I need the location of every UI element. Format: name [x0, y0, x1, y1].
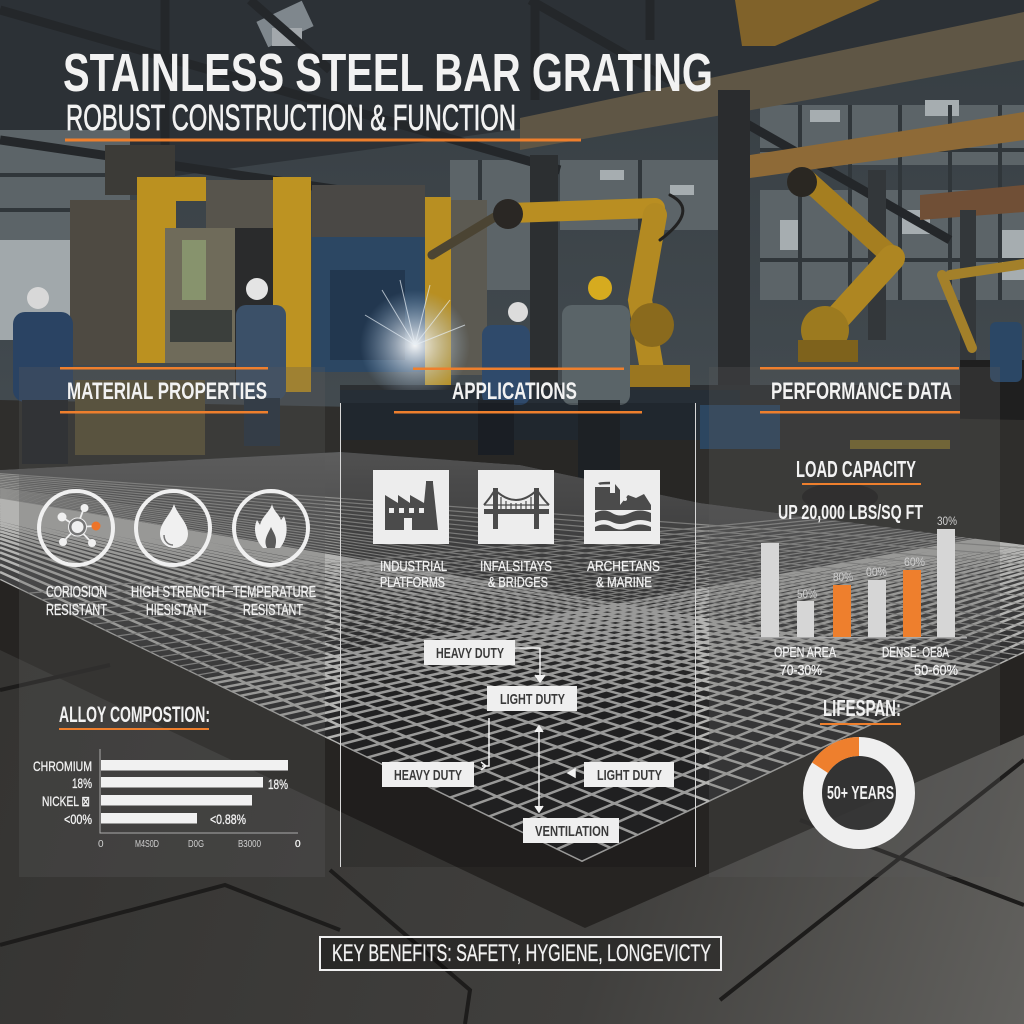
- floor: [0, 560, 1024, 1024]
- bar chart: open area: 60%: [904, 555, 925, 569]
- flow box: heavy duty lower: HEAVY DUTY: [394, 767, 462, 784]
- sparks: [360, 280, 470, 400]
- heading: material properties: MATERIAL PROPERTIES: [67, 378, 267, 405]
- bar chart: open area: 50-60%: [914, 662, 958, 679]
- panel: performance data: [709, 367, 1000, 877]
- bar chart: alloy composition: [33, 749, 301, 850]
- label: industrial platforms: INDUSTRIAL: [380, 558, 447, 575]
- floor cracks: [0, 665, 1024, 1024]
- title: STAINLESS STEEL BAR GRATING: [63, 43, 713, 103]
- heading: applications: APPLICATIONS: [452, 378, 577, 405]
- label: infrastructure and bridges: INFALSITAYS: [480, 558, 552, 575]
- bar chart: alloy composition: 18%: [72, 775, 92, 791]
- heading: load capacity: LOAD CAPACITY: [796, 456, 916, 482]
- bar chart: open area: 70-30%: [780, 662, 822, 679]
- label: corrosion resistant: RESISTANT: [46, 602, 107, 619]
- icon: bridge: [478, 470, 554, 544]
- bar chart: alloy composition: NICKEL ⊠: [42, 793, 90, 809]
- machine: press body: [70, 145, 487, 392]
- machine: left light window: [0, 240, 70, 340]
- workers: [13, 276, 1022, 482]
- icon: marine: [584, 470, 660, 544]
- robot arm 1: [432, 195, 690, 387]
- robot arm 2: [787, 167, 1024, 362]
- flow box: light duty: LIGHT DUTY: [500, 691, 565, 708]
- banner: key benefits: [320, 937, 721, 970]
- title underline: [65, 138, 581, 142]
- heading: lifespan: [820, 695, 901, 725]
- label: infrastructure and bridges: & BRIDGES: [488, 574, 548, 591]
- label: corrosion resistant: CORIOSION: [46, 584, 107, 601]
- flow box: heavy duty: [424, 640, 515, 665]
- bar chart: alloy composition: B3000: [238, 839, 261, 850]
- grating side face: [0, 580, 1024, 928]
- heading: performance data: PERFORMANCE DATA: [771, 378, 952, 405]
- icon: water drop: [136, 491, 210, 565]
- bar chart: alloy composition: 18%: [268, 776, 288, 792]
- icon: flame: [234, 491, 308, 565]
- bar chart: open area: OPEN AREA: [774, 644, 836, 661]
- label: high strength resistant: HIESISTANT: [146, 602, 208, 619]
- heading: alloy composition: ALLOY COMPOSTION:: [59, 702, 210, 727]
- bar chart: open area: 00%: [866, 565, 887, 579]
- flow box: light duty lower: LIGHT DUTY: [597, 767, 662, 784]
- bar chart: open area: 30%: [937, 514, 957, 528]
- label: infrastructure and bridges: [480, 558, 552, 591]
- banner: key benefits: KEY BENEFITS: SAFETY, HYGIENE, LONGEVICTY: [332, 940, 711, 967]
- label: temperature resistant: TEMPERATURE: [233, 584, 316, 601]
- label: industrial platforms: [380, 558, 447, 591]
- bar chart: alloy composition: <0.88%: [210, 811, 246, 827]
- heading: load capacity: [796, 456, 921, 485]
- bar chart: alloy composition: CHROMIUM: [33, 758, 92, 774]
- flow box: ventilation: VENTILATION: [535, 823, 609, 840]
- label: temperature resistant: [233, 584, 316, 619]
- bar chart: alloy composition: 0: [98, 839, 104, 850]
- flow box: heavy duty lower: [382, 762, 474, 787]
- label: temperature resistant: RESISTANT: [243, 602, 303, 619]
- flow box: light duty lower: [584, 762, 674, 787]
- bar chart: alloy composition: D0G: [188, 839, 204, 850]
- label: high strength resistant: [131, 584, 233, 619]
- label: corrosion resistant: [46, 584, 107, 619]
- donut chart: lifespan: 50+ YEARS: [827, 783, 894, 803]
- label: industrial platforms: PLATFORMS: [380, 574, 445, 591]
- icon: corrosion molecule: [39, 491, 113, 565]
- grating plate: [0, 452, 1024, 862]
- flow box: heavy duty: HEAVY DUTY: [436, 645, 504, 662]
- bar chart: open area: [750, 514, 967, 679]
- label: architecture and marine: [587, 558, 660, 591]
- label: architecture and marine: ARCHETANS: [587, 558, 660, 575]
- bar chart: open area: 50%: [797, 587, 817, 601]
- flow box: light duty: [487, 686, 577, 711]
- bar chart: alloy composition: 0: [295, 839, 301, 850]
- donut chart: lifespan: [812, 737, 906, 840]
- panel: material properties: [19, 367, 325, 877]
- arrows: flow connectors: [481, 648, 575, 812]
- label: high strength resistant: HIGH STRENGTH: [131, 584, 225, 601]
- bar chart: open area: 80%: [833, 570, 853, 584]
- label: architecture and marine: & MARINE: [596, 574, 652, 591]
- bar chart: alloy composition: <00%: [64, 811, 92, 827]
- panel: applications: [340, 368, 696, 867]
- bar chart: alloy composition: M4S0D: [135, 839, 159, 850]
- flow box: ventilation: [523, 818, 619, 843]
- icon: factory: [373, 470, 449, 544]
- load capacity value: UP 20,000 LBS/SQ FT: [778, 502, 923, 524]
- subtitle: ROBUST CONSTRUCTION & FUNCTION: [66, 97, 516, 138]
- bar chart: open area: DENSE: OE8A: [882, 644, 949, 661]
- heading: lifespan: LIFESPAN:: [823, 695, 901, 721]
